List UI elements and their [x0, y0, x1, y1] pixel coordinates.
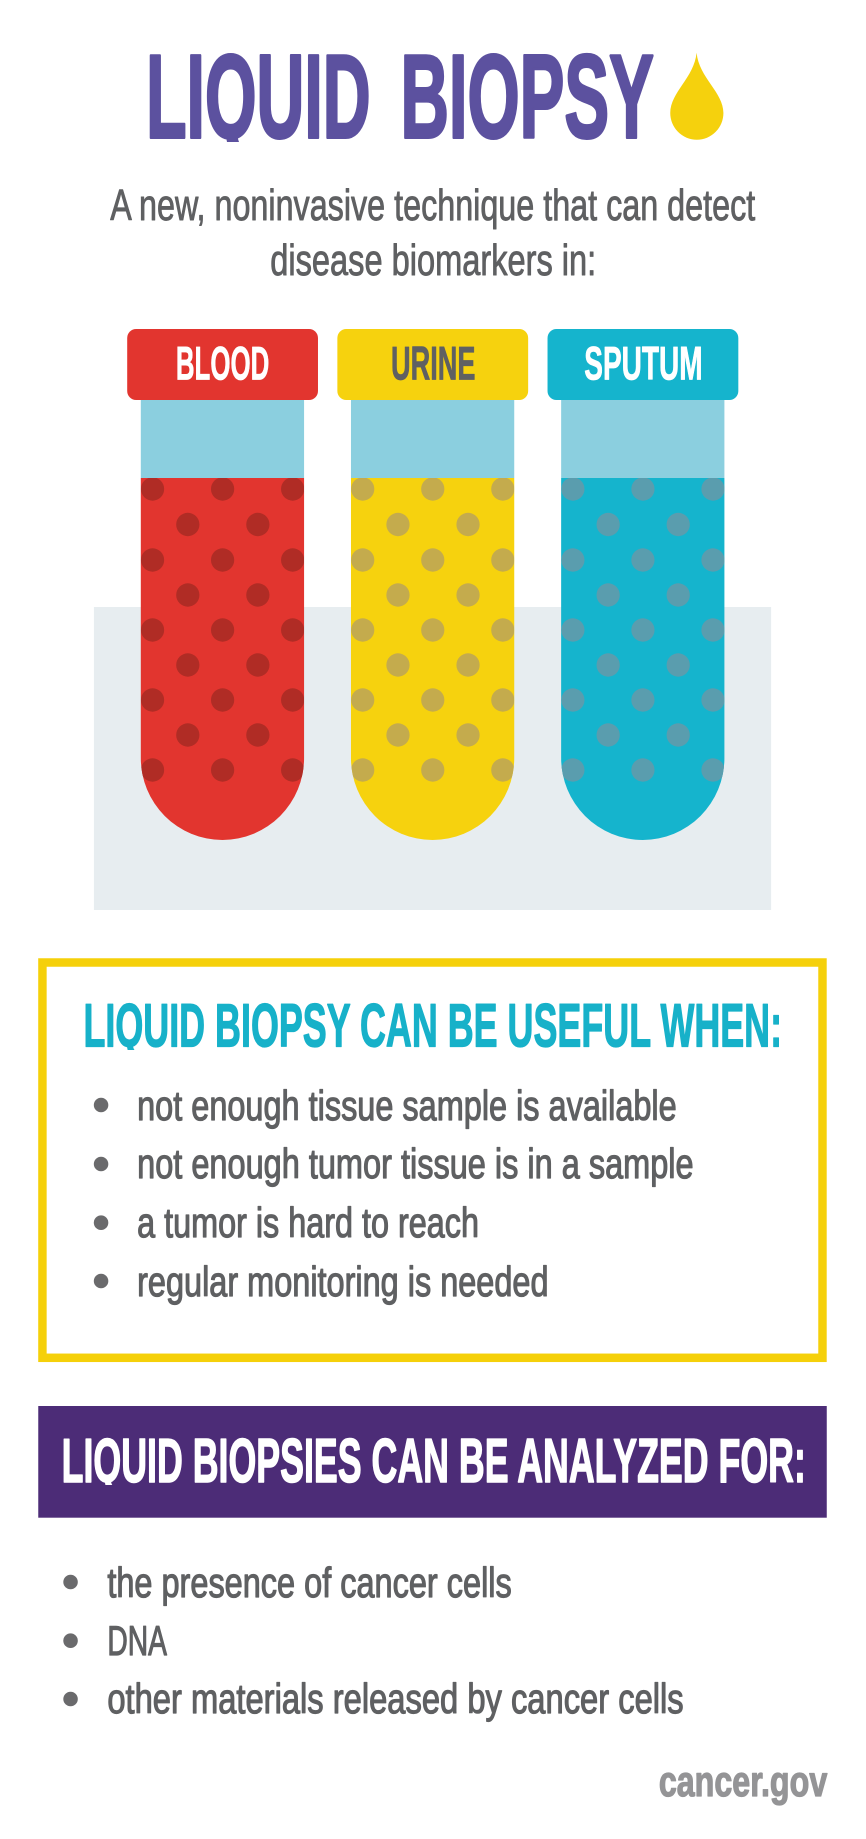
list: analyzed for: DNA [107, 1617, 167, 1664]
list: analyzed for: the presence of cancer cells [107, 1559, 512, 1606]
test tube: blood: BLOOD [176, 337, 269, 390]
list: useful when: not enough tissue sample is available [137, 1082, 677, 1129]
test tube: urine: URINE [391, 337, 475, 390]
list: analyzed for: other materials released by cancer cells [107, 1675, 684, 1722]
intro text: disease biomarkers in: [270, 236, 596, 285]
intro text [110, 181, 755, 285]
list: useful when: not enough tumor tissue is in a sample [137, 1140, 694, 1187]
test tube: sputum: SPUTUM [584, 337, 703, 390]
panel: useful when [42, 962, 822, 1358]
test tube rack [94, 607, 771, 910]
title [150, 52, 654, 142]
list: analyzed for [63, 1559, 684, 1722]
list: useful when: a tumor is hard to reach [137, 1199, 479, 1246]
test tube: sputum [548, 329, 738, 840]
test tube: blood [127, 329, 318, 840]
title: BIOPSY [400, 31, 654, 164]
test tube: urine [337, 329, 528, 840]
list: useful when [94, 1082, 694, 1305]
icon: liquid drop [670, 53, 723, 140]
panel: analyzed for banner [38, 1406, 827, 1518]
list: useful when: regular monitoring is needed [137, 1258, 549, 1305]
title: LIQUID [146, 31, 371, 164]
